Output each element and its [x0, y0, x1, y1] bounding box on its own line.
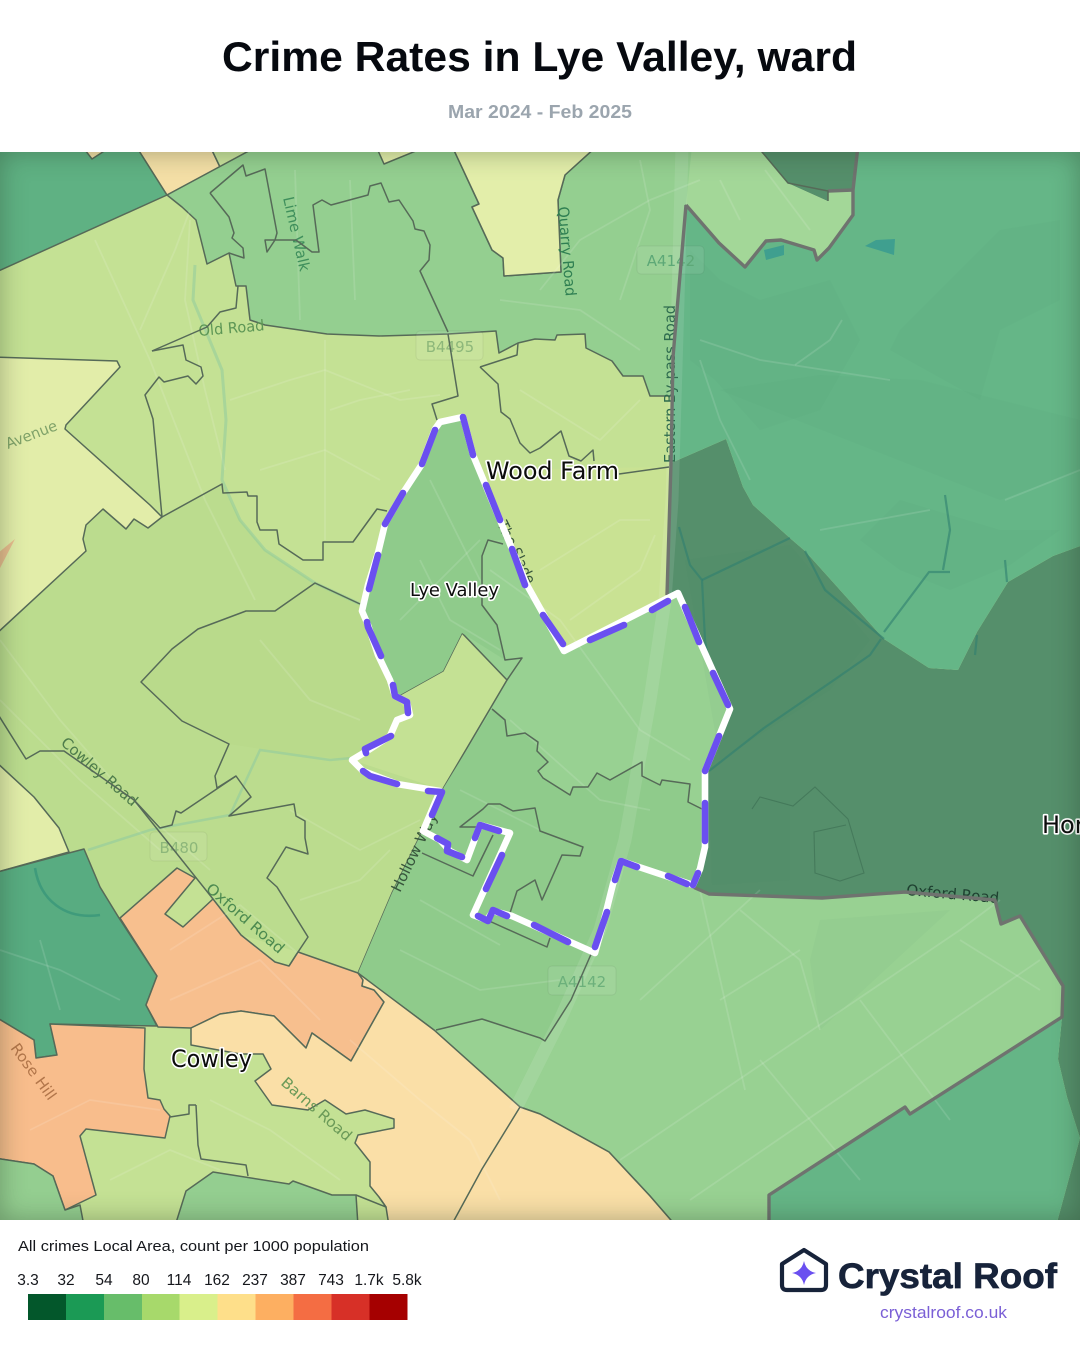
area: bottom mid green — [175, 1172, 358, 1226]
road shield: B4495 — [416, 331, 483, 360]
icon: house with star — [782, 1250, 826, 1290]
road label: Rose Hill: Rose Hill — [7, 1040, 60, 1104]
legend title: All crimes Local Area, count per 1000 population — [18, 1238, 369, 1255]
road shield: A4142 north — [637, 246, 704, 274]
choropleth map — [0, 152, 1080, 1220]
area: lower west neighbourhood — [0, 484, 443, 973]
area: orange cowley — [120, 868, 384, 1061]
road shield: B480: B480 — [160, 839, 198, 857]
place labels — [171, 457, 1080, 1073]
area: yellow west — [0, 357, 162, 636]
area: central lens — [141, 583, 410, 760]
area: cream south — [191, 973, 676, 1226]
area: north mid green — [167, 146, 853, 396]
subtitle: date range: Mar 2024 - Feb 2025 — [448, 101, 632, 122]
road label: Lime Walk: Lime Walk — [279, 195, 314, 273]
road label: The Slade: The Slade — [493, 517, 539, 587]
map edge vignette — [0, 152, 1080, 1220]
area: yellow north — [452, 146, 597, 276]
road shield: A4142 north: A4142 — [647, 252, 695, 270]
road labels — [3, 195, 1000, 1145]
legend value labels: 5.8k — [392, 1272, 422, 1289]
area: big mid green including ward — [358, 417, 1063, 1226]
place label: Wood Farm: Wood Farm — [486, 457, 619, 485]
area: south-west bottom green — [0, 1158, 84, 1226]
legend value labels: 237 — [242, 1272, 268, 1289]
legend value labels: 32 — [57, 1272, 75, 1289]
road label: Oxford Road east: Oxford Road — [906, 881, 1000, 907]
legend value labels: 743 — [318, 1272, 344, 1289]
road shield: A4142 south — [548, 966, 616, 995]
road label: Avenue: Avenue — [3, 417, 60, 453]
legend colour scale — [28, 1294, 408, 1320]
legend — [17, 1238, 422, 1320]
area: dark green east — [667, 439, 1080, 1226]
area: green south-east — [769, 1017, 1080, 1226]
road label: Cowley Road: Cowley Road — [57, 733, 142, 810]
road label: Oxford Road west: Oxford Road — [202, 879, 288, 957]
legend value labels: 80 — [132, 1272, 150, 1289]
legend value labels: 3.3 — [17, 1272, 39, 1289]
header — [222, 33, 857, 122]
legend value labels: 1.7k — [354, 1272, 384, 1289]
area: wood farm — [484, 467, 669, 651]
road label: Quarry Road: Quarry Road — [554, 206, 580, 297]
area: north cream — [136, 146, 220, 195]
road label: Eastern By-pass Road: Eastern By-pass Road — [661, 305, 679, 463]
ward boundary: Lye Valley — [352, 417, 730, 953]
road network — [0, 146, 1080, 1200]
road shield: B4495: B4495 — [426, 338, 474, 356]
area: green east woodland — [671, 146, 1080, 670]
road label: Hollow Way: Hollow Way — [387, 809, 441, 895]
legend value labels — [17, 1272, 422, 1289]
area: south-west green — [358, 709, 705, 1041]
website url: crystalroof.co.uk — [880, 1304, 1008, 1322]
brand logo — [782, 1250, 1057, 1322]
road shield: B480 — [150, 832, 207, 861]
boundary lines — [0, 146, 1063, 1226]
water: streams and ponds — [35, 239, 1007, 916]
area: north lobe of ward — [362, 417, 505, 696]
title: Crime Rates in Lye Valley, ward — [222, 33, 857, 80]
footer — [17, 1238, 1058, 1322]
woodland patches — [685, 220, 1080, 1030]
area: orange rose hill — [0, 1016, 170, 1210]
legend value labels: 162 — [204, 1272, 230, 1289]
brand name: Crystal Roof — [838, 1257, 1057, 1296]
area: north-east lighter estate — [686, 146, 853, 267]
road shield: A4142 south: A4142 — [558, 973, 606, 991]
legend value labels: 54 — [95, 1272, 113, 1289]
road label: Barns Road: Barns Road — [277, 1073, 356, 1145]
legend value labels: 387 — [280, 1272, 306, 1289]
place label: Cowley: Cowley — [171, 1045, 252, 1073]
place label: Lye Valley: Lye Valley — [410, 580, 499, 601]
area: north-west dark green — [0, 146, 167, 273]
area: south-west dark green — [0, 849, 157, 1058]
legend value labels: 114 — [167, 1272, 192, 1289]
road label: Old Road: Old Road — [198, 316, 265, 340]
